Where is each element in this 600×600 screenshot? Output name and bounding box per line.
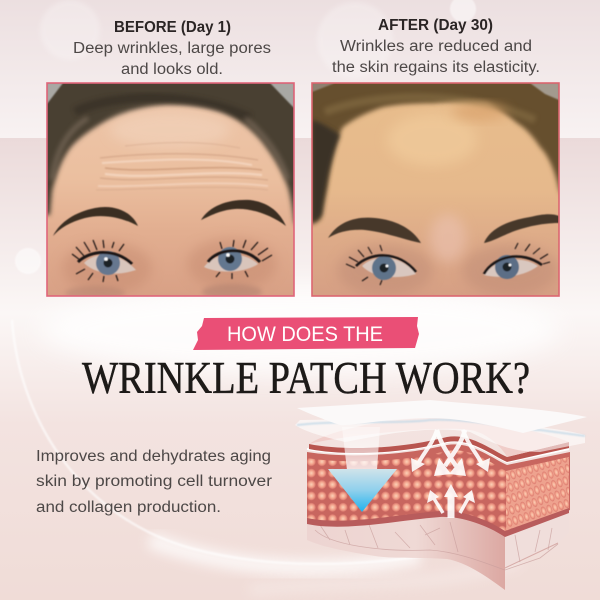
white arrows xyxy=(411,430,490,518)
cell layer xyxy=(300,418,570,540)
description text: and collagen production. xyxy=(36,499,221,516)
blue arrow xyxy=(328,427,397,512)
dermis layer xyxy=(307,510,569,590)
hair xyxy=(48,84,294,226)
patch sheets xyxy=(295,400,587,452)
ribbon: how does the: HOW DOES THE xyxy=(227,323,383,346)
shadows around eyes xyxy=(64,242,150,289)
title: WRINKLE PATCH WORK? xyxy=(82,353,530,403)
before photo: wrinkled forehead xyxy=(40,75,300,300)
ribbon: how does the xyxy=(193,317,419,350)
left eye xyxy=(72,240,136,282)
shadows around eyes and nose xyxy=(337,244,433,296)
right eye xyxy=(484,243,550,279)
before caption xyxy=(73,19,271,78)
up arrows xyxy=(427,484,475,518)
before caption: and looks old. xyxy=(121,61,223,78)
wrinkles xyxy=(96,142,268,190)
before caption: BEFORE (Day 1) xyxy=(114,19,231,36)
after caption: Wrinkles are reduced and xyxy=(340,38,532,55)
description text: skin by promoting cell turnover xyxy=(36,473,272,490)
eyebrows xyxy=(328,218,421,243)
after photo: smooth forehead xyxy=(305,75,565,296)
forehead highlight xyxy=(392,118,472,162)
after caption xyxy=(332,17,540,76)
left eye xyxy=(346,245,416,285)
forehead highlight xyxy=(110,112,230,148)
description text xyxy=(36,448,272,516)
description text: Improves and dehydrates aging xyxy=(36,448,271,465)
after caption: the skin regains its elasticity. xyxy=(332,59,540,76)
before caption: Deep wrinkles, large pores xyxy=(73,40,271,57)
hair xyxy=(312,84,558,226)
eyebrows xyxy=(53,207,138,236)
after caption: AFTER (Day 30) xyxy=(378,17,493,34)
curved arrows xyxy=(411,430,490,476)
right eye xyxy=(204,240,272,279)
skin diagram xyxy=(295,400,587,590)
